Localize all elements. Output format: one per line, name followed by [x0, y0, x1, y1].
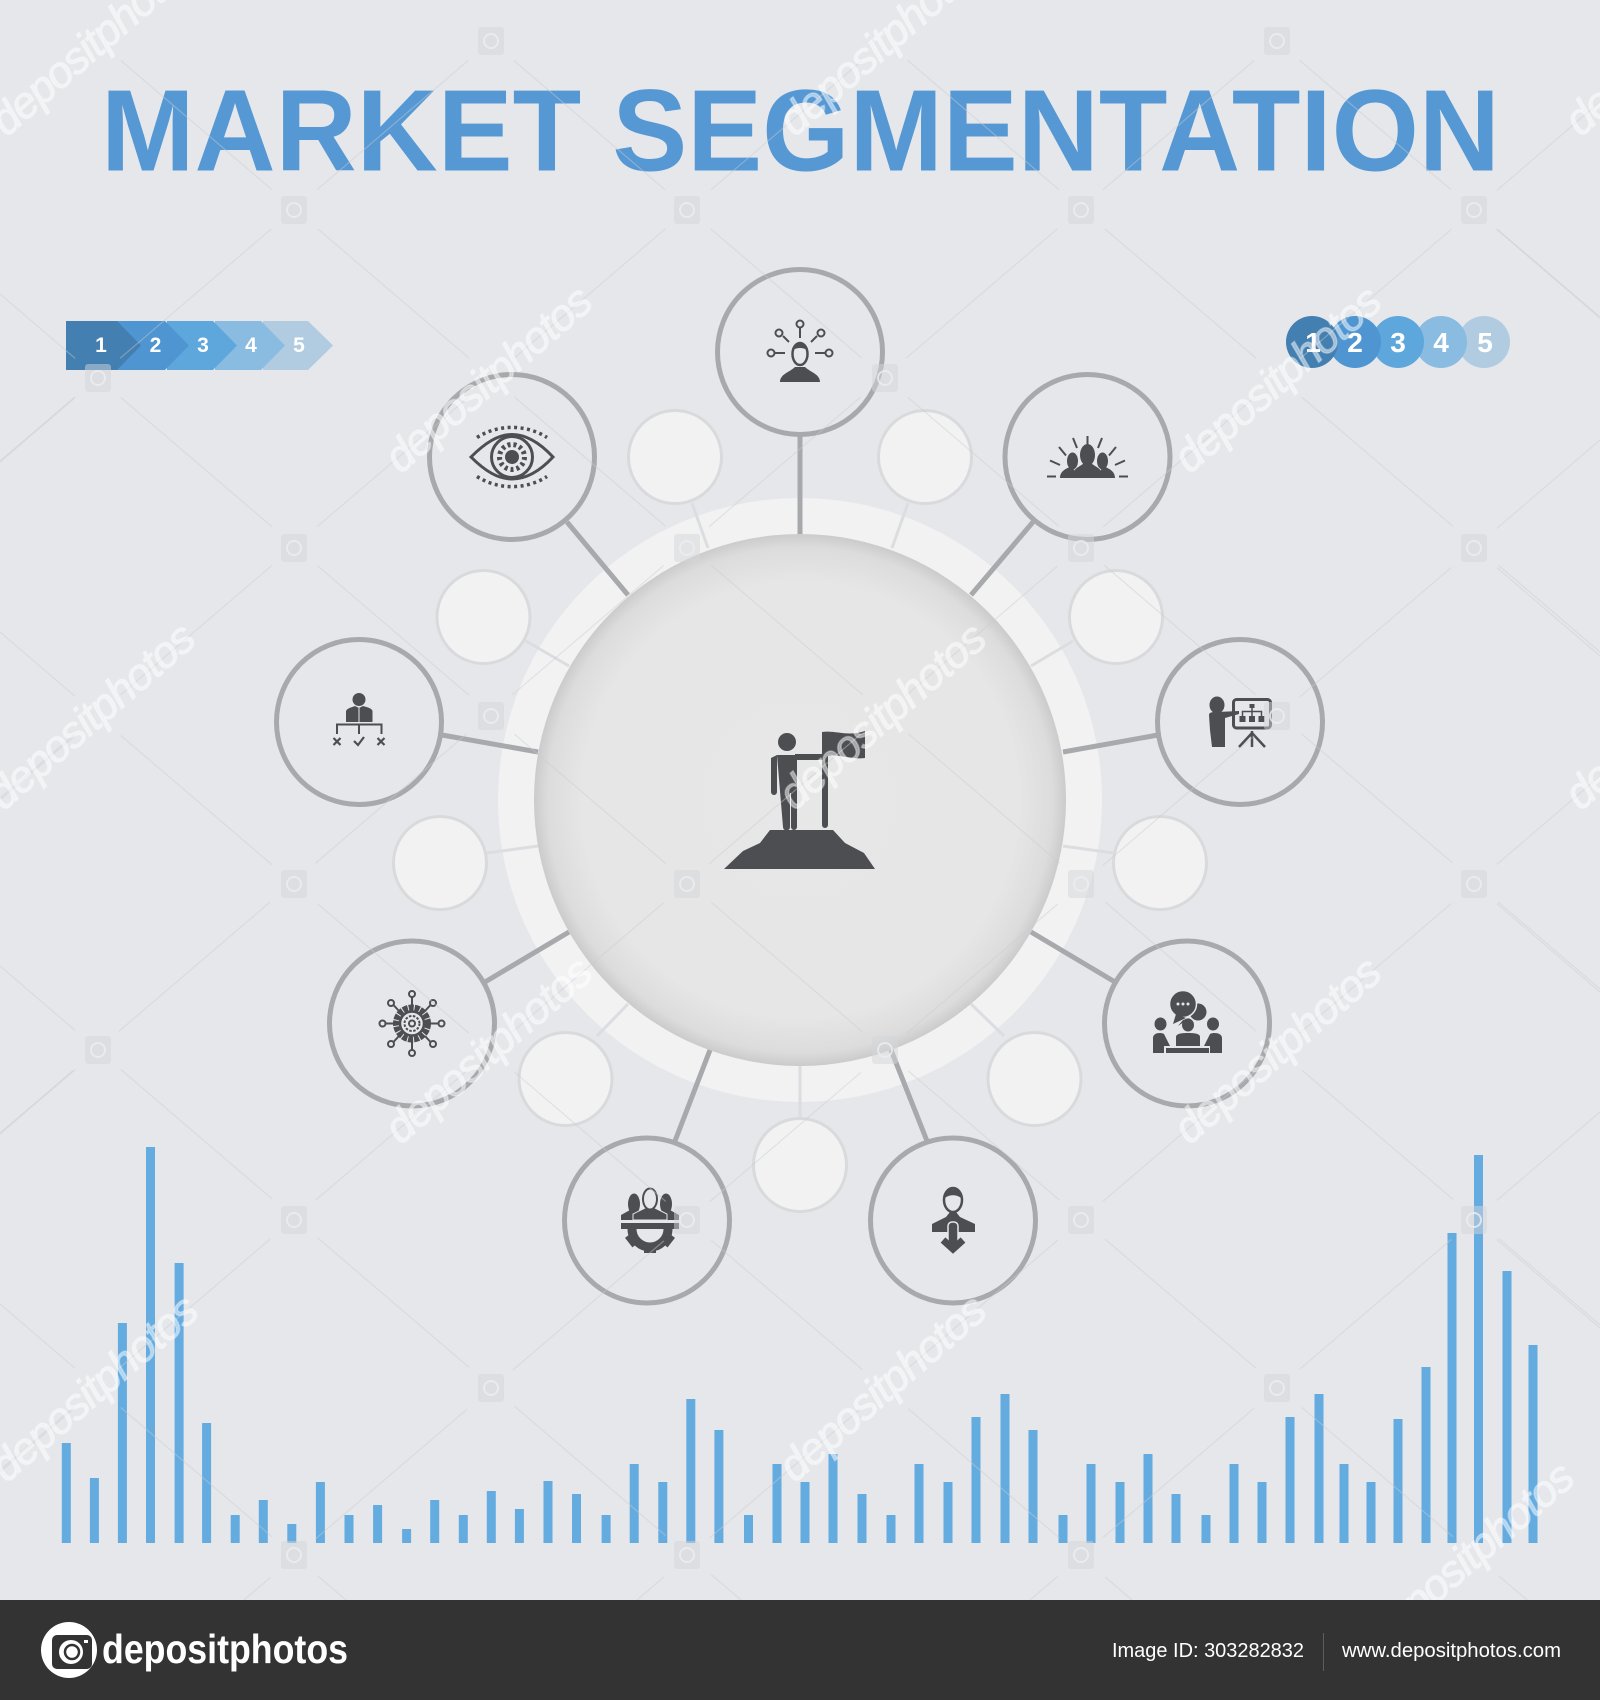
arrow step strip 1-5: 1 — [95, 334, 107, 357]
arrow step strip 1-5 — [66, 321, 333, 370]
footer logo mark — [41, 1622, 97, 1678]
arrow step strip 1-5: 2 — [150, 334, 161, 357]
numbered circles 1-5 — [1286, 316, 1510, 368]
numbered circles 1-5: 2 — [1347, 327, 1363, 358]
footer image id: Image ID: 303282832 — [1112, 1640, 1304, 1662]
footer url: www.depositphotos.com — [1341, 1640, 1561, 1662]
icon: person with decision tree — [334, 693, 384, 745]
thin connectors to small circles — [487, 503, 1113, 1118]
small empty circles — [394, 410, 1206, 1212]
watermark text: depositphotos — [375, 947, 602, 1153]
icon: team above gear — [621, 1188, 679, 1253]
watermark text: depositphotos — [1164, 947, 1391, 1153]
watermark camera marks — [85, 27, 1487, 1569]
numbered circles 1-5: 5 — [1477, 327, 1493, 358]
watermark text: depositphotos — [769, 1285, 996, 1491]
watermark text: depositphotos — [1357, 1452, 1584, 1658]
bar chart — [62, 1147, 1537, 1543]
icon: person with down arrow — [932, 1188, 975, 1249]
arrow step strip 1-5: 4 — [245, 334, 257, 357]
watermark text: depositphotos — [375, 276, 602, 482]
footer logo text: depositphotos — [102, 1626, 348, 1672]
numbered circles 1-5: 1 — [1305, 327, 1321, 358]
central hub circle — [534, 534, 1066, 1066]
title: MARKET SEGMENTATION — [101, 66, 1500, 196]
icon: leader with flag on summit — [724, 731, 875, 869]
watermark text: depositphotos — [1164, 276, 1391, 482]
watermark text: depositphotos — [769, 613, 996, 819]
numbered circles 1-5: 3 — [1390, 327, 1406, 358]
hub outer ring — [498, 498, 1102, 1102]
numbered circles 1-5: 4 — [1433, 327, 1449, 358]
thick connectors to icon nodes — [442, 436, 1158, 1141]
footer bar — [0, 1600, 1600, 1700]
icon: gear with network nodes — [380, 991, 444, 1056]
arrow step strip 1-5: 5 — [293, 334, 305, 357]
icon: presenter at chart board — [1209, 696, 1270, 747]
icon: head with connected nodes — [768, 320, 832, 382]
icon: group with rays — [1047, 436, 1128, 478]
icon node rings — [276, 270, 1322, 1303]
icon: meeting with speech bubbles — [1153, 990, 1222, 1053]
arrow step strip 1-5: 3 — [197, 334, 209, 357]
icon: eye — [471, 427, 553, 487]
